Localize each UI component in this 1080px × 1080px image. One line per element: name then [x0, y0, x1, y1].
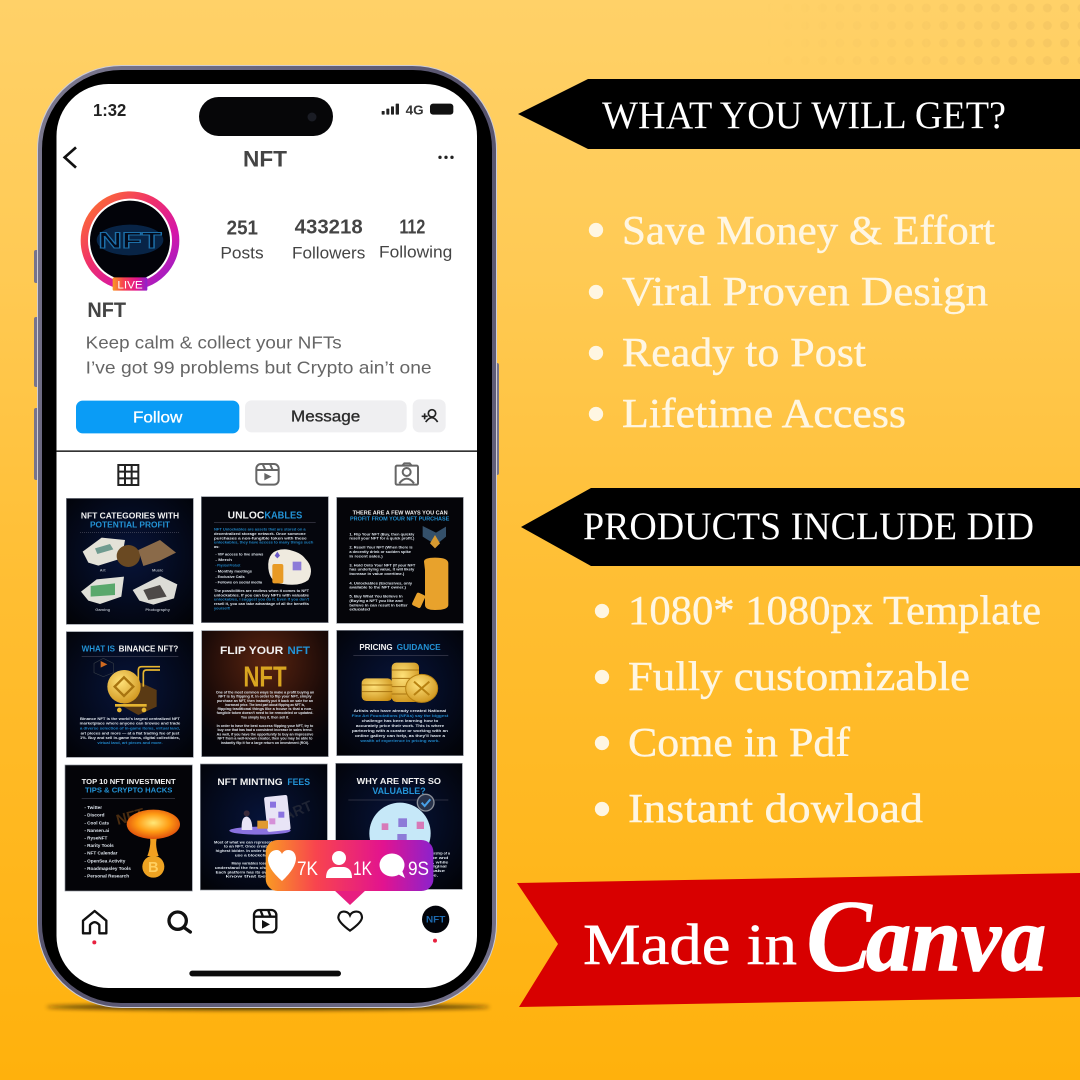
products list: 1080* 1080px Template	[628, 587, 1041, 633]
post: minting fees	[200, 764, 327, 890]
stats: Followers	[292, 243, 365, 262]
post: unlockables: KABLES	[264, 510, 303, 521]
post: ways to profit: resell your NFT for a quick profit.)	[349, 537, 415, 541]
post: NFT categories: Art	[100, 567, 106, 572]
post: ways to profit: increase in value overtime.)	[349, 572, 405, 576]
post: minting fees: use a blockchain platform.	[235, 853, 293, 857]
phone shadow	[46, 1004, 490, 1010]
page title: NFT	[243, 146, 288, 171]
stats: 112	[399, 216, 425, 238]
post: unlockables: NFT Unlockables are assets that are stored on a	[214, 528, 307, 532]
post: binance NFT: 1%. Buy and sell in-game items, digital collectibles,	[80, 736, 180, 740]
post: ways to profit: PROFIT FROM YOUR NFT PURCHASE	[350, 516, 450, 522]
post: minting fees: highest bidder. In order to create and sell an NFT,	[216, 849, 312, 853]
status icons	[382, 104, 453, 118]
post: ways to profit	[337, 497, 463, 623]
nav: search	[169, 912, 190, 932]
post: flip your NFT: purchase an NFT, then instantly put it back on sale for an	[217, 699, 314, 703]
post: investment tips: - OpenSea Activity	[84, 858, 126, 863]
post: minting fees: FEES	[287, 777, 310, 787]
post: NFT categories: NFT CATEGORIES WITH	[81, 511, 179, 520]
post: unlockables: resell it, you can take advantage of all the benefits	[214, 602, 309, 606]
post: pricing guidance	[337, 630, 463, 756]
post: unlockables: decentralized storage network. Once someone	[214, 532, 306, 536]
post: investment tips: - Nansen.ai	[84, 828, 109, 833]
divider	[56, 450, 477, 452]
post: flip your NFT: instantly flip it for a large return on investment (ROI).	[221, 741, 309, 745]
post: ways to profit: has underlying value, it will likely	[349, 568, 415, 572]
post: why are NFTs valuable: ownership of a	[425, 852, 451, 856]
badge: followers	[326, 851, 372, 880]
tab: tagged	[396, 463, 418, 485]
post: flip your NFT: NFT	[287, 645, 310, 657]
post: binance NFT: BINANCE NFT?	[119, 644, 178, 653]
post: flip your NFT: You simply buy it, then sell it.	[241, 716, 289, 720]
banner: made in canva	[517, 873, 1080, 1007]
post: flip your NFT: flipping traditional things like a house is that a non-	[217, 707, 313, 711]
avatar with live ring: LIVE	[117, 279, 143, 291]
post: minting fees: understand the fees charged before creating.	[215, 866, 313, 870]
banner: made in canva: anva	[866, 888, 1046, 990]
banner: products include: PRODUCTS INCLUDE DID	[583, 505, 1034, 548]
badge: followers: 1K	[353, 858, 372, 880]
post: why are NFTs valuable: original	[428, 865, 447, 869]
post: investment tips: - Personal Research	[84, 874, 129, 879]
post: NFT categories: POTENTIAL PROFIT	[90, 521, 170, 530]
post: ways to profit: 3. Hold Onto Your NFT (If your NFT	[349, 563, 416, 567]
post: flip your NFT: buy one that has had a consistent increase in sales trend.	[217, 728, 312, 732]
dotted background pattern	[1050, 4, 1080, 65]
post: unlockables: - Merch	[215, 558, 233, 562]
post: minting fees: Most of what we can represent digitally can be made	[214, 840, 314, 844]
post: minting fees: to an NFT. Once created, the NFT can be	[224, 845, 304, 849]
benefits list: Lifetime Access	[622, 390, 906, 436]
post: pricing guidance: PRICING	[359, 642, 393, 652]
post: binance NFT: art pieces and more — at a flat trading fee of just	[81, 731, 180, 735]
post: pricing guidance: accurately price their work. This is where	[356, 724, 444, 728]
avatar with live ring: NFT	[98, 228, 163, 253]
post: binance NFT: Binance NFT is the world's largest centralized NFT	[80, 717, 181, 721]
post: ways to profit: 2. Resell Your NFT (When there is	[349, 546, 413, 550]
post: binance NFT: WHAT IS	[82, 644, 116, 653]
post: ways to profit: THERE ARE A FEW WAYS YOU CAN	[353, 510, 448, 516]
post: NFT categories: Music	[152, 567, 164, 572]
post: unlockables: - Follows on social media	[215, 580, 263, 584]
post: flip your NFT: FLIP YOUR	[220, 645, 283, 657]
post: flip your NFT	[202, 631, 328, 757]
products list: Come in Pdf	[628, 719, 850, 765]
back arrow	[65, 147, 76, 168]
post: flip your NFT: fungible token doesn't need to be remodeled or updated.	[217, 711, 313, 715]
post: ways to profit: 5. Buy What You Believe In	[349, 595, 403, 599]
post: binance NFT: marketplace where anyone can browse and trade	[80, 722, 180, 726]
post: investment tips: - Twitter	[84, 805, 102, 810]
post: why are NFTs valuable: WHY ARE NFTS SO	[357, 776, 441, 786]
post: investment tips: TIPS & CRYPTO HACKS	[85, 785, 172, 794]
post: investment tips: - Discord	[84, 813, 105, 818]
products list: Fully customizable	[628, 653, 970, 699]
status time: 1:32	[93, 100, 126, 120]
nav: reels	[254, 910, 276, 932]
benefits list: Viral Proven Design	[622, 268, 988, 314]
post: minting fees: Many variables lose money, so you'll	[231, 862, 296, 866]
stats: 433218	[295, 216, 363, 238]
side buttons	[34, 250, 499, 480]
post: NFT categories	[66, 498, 193, 624]
post: pricing guidance: partnering with a curator or working with an	[352, 729, 449, 733]
post: why are NFTs valuable: ique and	[427, 856, 449, 860]
post: why are NFTs valuable	[336, 763, 462, 889]
post: unlockables: - VIP access to live shows	[215, 552, 263, 556]
post: investment tips: NFT	[115, 806, 146, 829]
message button	[245, 400, 407, 432]
stats: Posts	[220, 243, 264, 262]
post: unlockables: unlockables. If you can buy NFTs with valuable	[214, 593, 309, 597]
banner: made in canva: C	[806, 879, 874, 994]
post: flip your NFT: NFT from a well-known creator, then you may be able to	[217, 737, 313, 741]
post: why are NFTs valuable: VALUABLE?	[372, 786, 426, 796]
post: NFT categories: Gaming	[95, 607, 111, 612]
nav: home dot	[92, 940, 96, 944]
post: why are NFTs valuable: ive.	[428, 873, 438, 877]
banner: what you will get: WHAT YOU WILL GET?	[602, 94, 1006, 137]
more dots	[438, 156, 454, 159]
stats	[220, 216, 452, 262]
post: unlockables: unlockables, I suggest you do it. Even if you don't	[214, 598, 310, 602]
bio: I’ve got 99 problems but Crypto ain’t one	[86, 357, 432, 377]
nav: avatar dot	[433, 939, 437, 943]
post: pricing guidance: Artists who have already created National	[354, 709, 446, 713]
post: binance NFT	[66, 632, 193, 757]
stats: 251	[227, 218, 258, 240]
post: investment tips: B	[148, 860, 159, 876]
post: unlockables: UNLOC	[228, 510, 264, 521]
post: binance NFT: virtual land, art pieces and more.	[97, 741, 163, 745]
post: unlockables	[201, 497, 328, 623]
post: minting fees: ART	[281, 798, 315, 825]
banner: made in canva: Made in	[583, 912, 797, 977]
post: why are NFTs valuable: ts, while	[428, 860, 448, 864]
notification badge	[266, 840, 433, 905]
post: ways to profit: educated	[349, 608, 371, 612]
post: unlockables: purchases a non-fungible token with these	[214, 536, 307, 540]
post: ways to profit: 4. Unlockables (Exclusives, only	[349, 581, 413, 585]
status icons: 4G	[406, 104, 424, 118]
post: binance NFT: a diverse selection of in-game items, virtual land,	[80, 727, 180, 731]
tab: grid	[118, 465, 138, 485]
post: minting fees: Each platform has its own fee structure, you'll	[216, 870, 312, 874]
bio: Keep calm & collect your NFTs	[86, 332, 342, 352]
nav: heart	[338, 912, 362, 931]
post: pricing guidance: challenge has been learning how to	[362, 719, 439, 723]
post: unlockables: - Physical Product	[215, 564, 241, 568]
post: ways to profit: 1. Flip Your NFT (Buy, then quickly	[349, 532, 415, 536]
home indicator	[189, 971, 341, 976]
post: flip your NFT: As well, if you have the opportunity to buy an impressive	[217, 732, 313, 736]
avatar with live ring	[84, 195, 176, 291]
post: NFT categories: Photography	[145, 607, 171, 612]
dynamic island	[199, 97, 333, 136]
benefits list: Save Money & Effort	[622, 207, 996, 253]
follow button	[76, 401, 239, 433]
post: investment tips	[65, 765, 192, 891]
post: unlockables: - Exclusive Calls	[215, 575, 245, 579]
banner: products include	[521, 488, 1080, 566]
post: flip your NFT: NFT is by flipping it. In order to flip your NFT, simply	[218, 695, 313, 699]
nav: avatar	[422, 906, 449, 933]
post: ways to profit: (Buying a NFT you like and	[349, 599, 403, 603]
post: unlockables: unlockables, they have access to many things such	[214, 541, 314, 545]
post: pricing guidance: Fine Art Foundations (NFAs) say the biggest	[352, 714, 449, 718]
post: pricing guidance: online gallery can help, as they'll have a	[355, 734, 446, 738]
badge: likes: 7K	[297, 858, 318, 880]
profile name: NFT	[87, 298, 126, 322]
banner: what you will get	[518, 79, 1080, 149]
post: investment tips: - RyseNFT	[84, 835, 108, 840]
badge: comments: 9S	[408, 858, 429, 880]
post: investment tips: TOP 10 NFT INVESTMENT	[82, 777, 176, 786]
post: minting fees: NFT MINTING	[217, 777, 283, 787]
post: flip your NFT: One of the most common ways to make a profit buying an	[216, 690, 315, 694]
message button: Message	[291, 409, 360, 426]
badge: likes	[268, 850, 318, 881]
bottom nav	[83, 906, 449, 976]
nav: avatar: NFT	[426, 915, 446, 925]
follow button: Follow	[133, 409, 183, 426]
post: flip your NFT: NFT	[243, 662, 287, 694]
benefits list	[589, 207, 996, 436]
post: ways to profit: a decently drink or sudden spike	[349, 550, 411, 554]
post grid	[65, 497, 463, 891]
benefits list: Ready to Post	[622, 329, 867, 375]
tab: reels	[256, 464, 279, 485]
nav: home	[83, 911, 106, 933]
post: unlockables: as:	[214, 545, 220, 549]
badge: comments	[380, 854, 429, 880]
post: unlockables: - Monthly meetings	[215, 569, 252, 573]
post: flip your NFT: In order to have the best success flipping your NFT, try to	[217, 724, 314, 728]
post: investment tips: - NFT Calendar	[84, 851, 118, 856]
phone	[34, 66, 499, 1008]
post: investment tips: - Roadmapsley Tools	[84, 866, 131, 871]
post: why are NFTs valuable: make	[428, 869, 445, 873]
post: ways to profit: believe in can result in better	[349, 603, 408, 607]
post: unlockables: The possibilities are endless when it comes to NFT	[214, 589, 310, 593]
post: pricing guidance: wealth of experience in pricing work.	[359, 739, 440, 743]
phone frame	[38, 66, 496, 1008]
post: ways to profit: available to the NFT owner.)	[349, 586, 407, 590]
products list	[595, 587, 1041, 831]
post: pricing guidance: GUIDANCE	[397, 642, 441, 652]
add person button	[413, 399, 446, 432]
products list: Instant dowload	[628, 785, 923, 831]
post: investment tips: - Cool Cats	[84, 820, 109, 825]
bio	[86, 332, 432, 377]
post: investment tips: - Rarity Tools	[84, 843, 114, 848]
post: flip your NFT: increased price. The best part about flipping an NFT is,	[225, 703, 305, 707]
post: unlockables: yourself!	[214, 606, 230, 610]
post: ways to profit: in recent sales.)	[349, 554, 383, 558]
profile header	[56, 100, 477, 485]
post: minting fees: know that before selling.	[226, 875, 302, 879]
stats: Following	[379, 243, 452, 262]
